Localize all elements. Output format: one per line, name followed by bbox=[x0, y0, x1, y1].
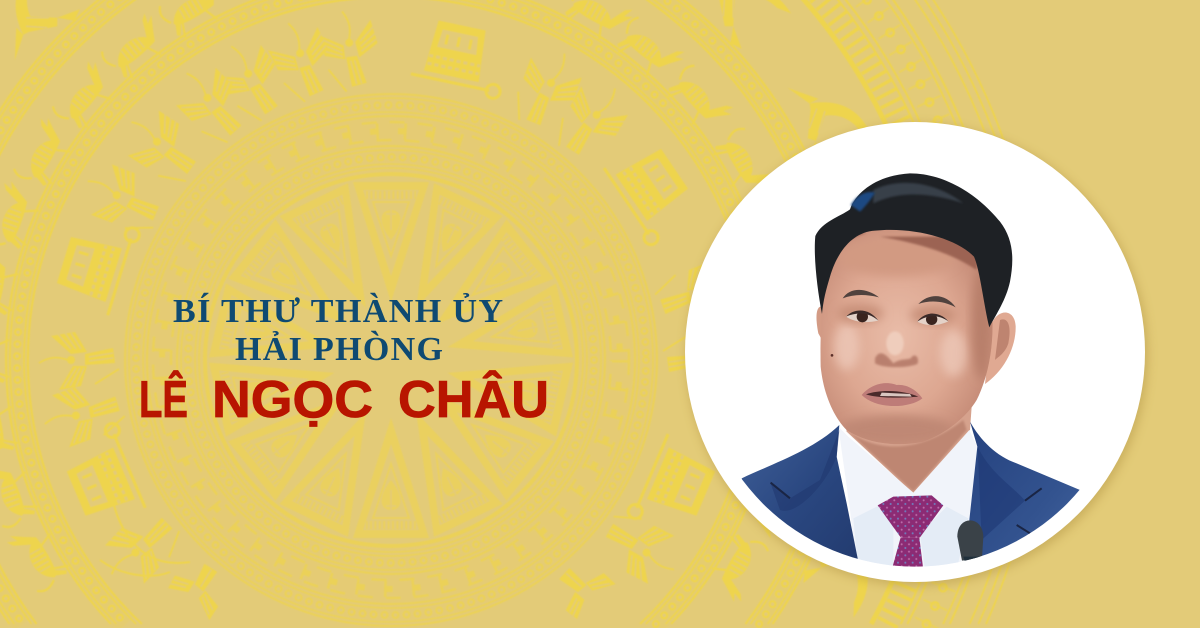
suit right bbox=[969, 422, 1080, 559]
title bbox=[139, 292, 549, 429]
tie bbox=[878, 495, 943, 537]
portrait photo bbox=[742, 173, 1087, 570]
deer zone bbox=[0, 0, 802, 605]
heading: position: BÍ THƯ THÀNH ỦY bbox=[173, 292, 503, 330]
heading: position: HẢI PHÒNG bbox=[235, 330, 443, 368]
heading: name: NGỌC bbox=[212, 371, 373, 429]
heading: position bbox=[173, 292, 503, 368]
nose bbox=[875, 353, 918, 367]
dancers and houses zone bbox=[39, 7, 743, 622]
inner disc rings bbox=[125, 94, 657, 626]
eyebrows bbox=[843, 290, 879, 298]
neck bbox=[846, 407, 972, 492]
portrait circle bbox=[685, 122, 1148, 586]
ears bbox=[985, 312, 1016, 384]
microphone bbox=[957, 520, 983, 561]
heading: name: LÊ bbox=[139, 370, 188, 429]
face bbox=[821, 228, 993, 444]
hair bbox=[815, 173, 1012, 327]
suit left bbox=[742, 425, 860, 570]
fourteen-point star triangles bbox=[209, 182, 573, 538]
heading: name bbox=[139, 370, 549, 429]
shirt bbox=[838, 427, 977, 570]
eyes bbox=[846, 311, 878, 322]
mouth bbox=[862, 383, 922, 406]
heading: name: CHÂU bbox=[398, 370, 549, 429]
big birds zone bbox=[0, 0, 923, 628]
boat hull lower left bbox=[100, 468, 190, 576]
